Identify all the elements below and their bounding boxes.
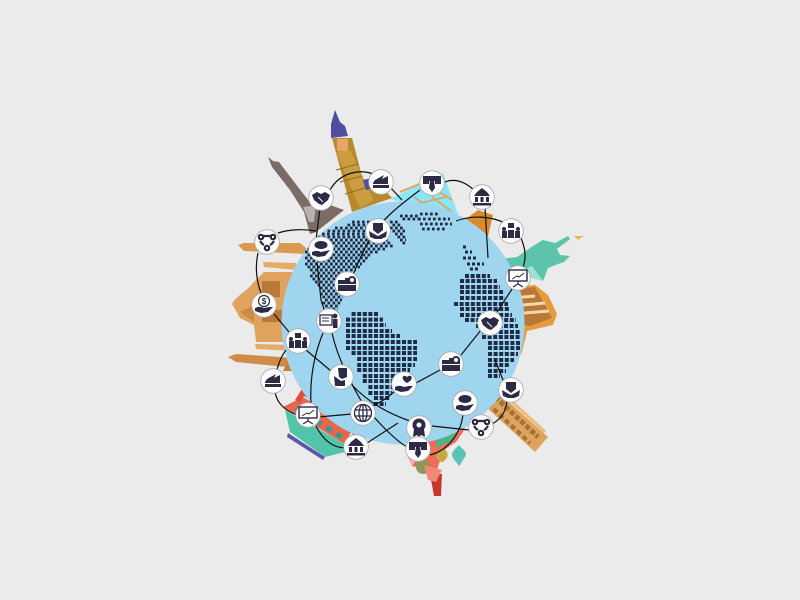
monument: Big Ben — [331, 110, 392, 212]
monument: pavilion with teal roof — [283, 384, 361, 460]
icon: presentation right — [506, 266, 530, 290]
icon: heart in hand — [392, 372, 416, 396]
icon: shield with hands right — [499, 378, 523, 402]
monument: Leaning Tower of Pisa — [472, 378, 548, 452]
icon: dollar in hand: $ — [262, 297, 267, 306]
monument: Taj Mahal — [228, 243, 306, 371]
icon: business tie top — [420, 171, 444, 195]
South America dots — [346, 314, 417, 404]
icon: bank top — [470, 185, 494, 209]
icon: chart in hand left — [261, 369, 285, 393]
icon: business tie bottom — [406, 437, 430, 461]
monument: Statue of Liberty — [492, 236, 584, 282]
icon: network people bottom right — [469, 415, 493, 439]
icon: presentation bottom left — [296, 403, 320, 427]
icon: briefcase centre right — [439, 352, 463, 376]
icon: broken person — [329, 365, 353, 389]
Greenland dots — [418, 214, 452, 229]
icon: coins in hand bottom right — [453, 391, 477, 415]
connecting lines — [256, 172, 525, 455]
icon: chart in hand top — [369, 170, 393, 194]
monument: Saint Basil's cathedral — [404, 410, 470, 496]
icon: briefcase left — [335, 272, 359, 296]
icon: bank bottom — [344, 435, 368, 459]
icon: coins in hand left — [309, 237, 333, 261]
icon: shield with hands top — [366, 219, 390, 243]
Europe dots — [463, 247, 484, 269]
icon: handshake right — [478, 311, 502, 335]
icon: handshake top — [309, 186, 333, 210]
icon: meeting right — [499, 219, 523, 243]
Africa dots — [454, 276, 520, 376]
globe — [282, 202, 524, 444]
icon: ID card with person — [317, 309, 341, 333]
icon: dollar in hand — [252, 293, 276, 317]
icon: meeting left — [286, 329, 310, 353]
monument: Colosseum — [488, 285, 557, 373]
icons — [252, 170, 530, 461]
cyan light beam — [390, 173, 461, 222]
monument: orange pyramid — [462, 210, 493, 260]
North America dots — [305, 216, 420, 318]
icon: network people left — [255, 230, 279, 254]
icon: globe — [351, 401, 375, 425]
monument: Eiffel Tower — [268, 157, 344, 234]
icon: award ribbon — [407, 416, 431, 440]
